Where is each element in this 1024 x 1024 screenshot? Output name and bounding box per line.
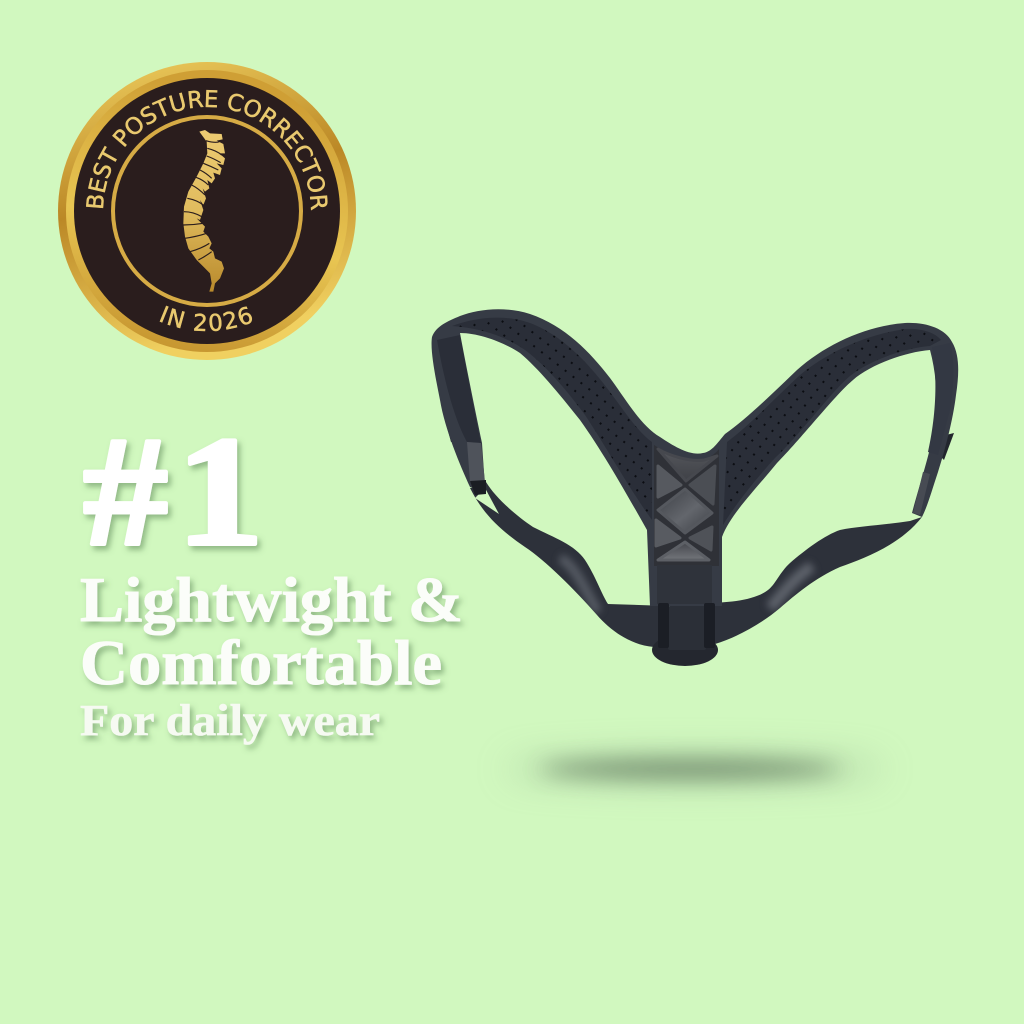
centre buckle [658, 603, 715, 650]
tagline: For daily wear [80, 696, 380, 745]
right shoulder perforated panel [723, 329, 941, 525]
icon: spine [183, 130, 225, 292]
left shoulder perforated panel [452, 318, 652, 520]
left lower strap [470, 482, 668, 647]
left descending strap panel [437, 335, 481, 443]
headline: #1 [83, 404, 264, 578]
tab on right side [940, 433, 954, 460]
product floating shadow [505, 757, 885, 781]
left strap highlight [560, 558, 598, 612]
left lower strap gap [475, 488, 499, 514]
left lower loop [467, 442, 485, 482]
main shoulder body [432, 309, 958, 606]
badge: best posture corrector [58, 62, 356, 360]
badge arc text top: BEST POSTURE CORRECTOR [86, 90, 328, 210]
headline: #1: # [83, 404, 168, 578]
tab on left side [442, 405, 456, 442]
subheading line 2: Comfortable [80, 628, 442, 698]
rounded base plate [652, 634, 718, 666]
product: posture corrector harness [432, 309, 958, 666]
right descending strap panel [928, 343, 953, 455]
velcro patch [657, 565, 712, 604]
subheading line 1: Lightwight & [80, 565, 463, 635]
right strap highlight [770, 566, 812, 608]
right lower strap [700, 517, 922, 647]
left black clip [470, 480, 486, 495]
headline: #1: 1 [176, 404, 264, 578]
right lower loop [913, 472, 930, 515]
badge arc text bottom: IN 2026 [160, 306, 252, 332]
quilted back pad [654, 445, 719, 566]
